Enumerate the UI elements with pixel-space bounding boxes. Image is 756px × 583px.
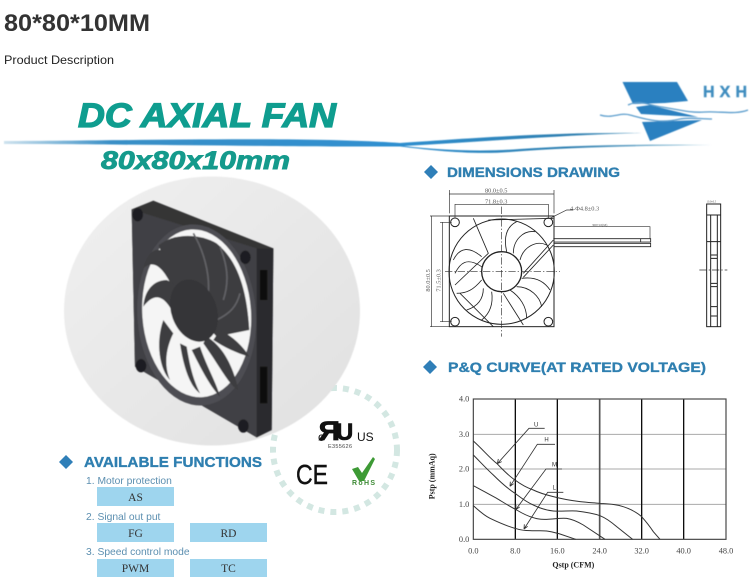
fan blades xyxy=(143,236,249,397)
dimension labels xyxy=(425,188,717,292)
heading: P&Q curve: P&Q CURVE(AT RATED VOLTAGE) xyxy=(448,359,706,375)
y axis labels: 2.0 xyxy=(459,465,469,474)
dotted certification ring xyxy=(273,388,397,512)
side view xyxy=(707,204,721,327)
dimension labels: 80.0±0.5 xyxy=(425,269,432,292)
UL mark: c xyxy=(318,430,324,444)
CE mark: CE xyxy=(296,459,328,490)
x axis labels: 16.0 xyxy=(550,546,565,555)
banner subheading: size: 80x80x10mm xyxy=(101,147,290,175)
fan mounting holes xyxy=(132,208,267,433)
front view xyxy=(449,216,554,327)
subtitle: product description: Product Description xyxy=(4,53,114,67)
UL mark: R xyxy=(319,416,340,447)
curve leader lines xyxy=(497,428,563,529)
RoHS mark: RoHS xyxy=(352,480,375,487)
dimension labels: 4-Φ4.8±0.3 xyxy=(570,206,599,213)
function group: speed control mode: 3. Speed control mode xyxy=(86,547,190,558)
y axis title: Pstp (mmAq) xyxy=(428,453,437,499)
product photo disc xyxy=(64,176,360,446)
x axis labels: 48.0 xyxy=(719,546,733,555)
function group: motor protection: 1. Motor protection xyxy=(86,476,172,487)
curves xyxy=(473,441,660,539)
function group: signal output: 2. Signal out put xyxy=(86,512,161,523)
certification marks xyxy=(296,416,375,490)
function group: speed control mode: TC xyxy=(221,563,236,575)
curve labels: L xyxy=(553,486,557,492)
UL mark: U xyxy=(336,419,353,446)
product photo: fan xyxy=(131,201,273,437)
curve labels: H xyxy=(544,438,549,444)
fan opening xyxy=(137,226,257,401)
dimension labels: 71.8±0.3 xyxy=(485,198,507,205)
blade highlights xyxy=(193,233,240,320)
x axis labels: 40.0 xyxy=(676,546,691,555)
banner heading: DC axial fan: DC AXIAL FAN xyxy=(78,97,338,135)
logo wordmark: HXH xyxy=(703,84,747,101)
logo: HXH xyxy=(600,82,748,141)
dimension labels: 300±10(M) xyxy=(592,223,607,227)
heading: available functions: AVAILABLE FUNCTIONS xyxy=(84,455,262,471)
horizontal grid xyxy=(473,434,726,504)
dimension labels: 10.0±0.5 xyxy=(707,201,717,204)
x axis labels: 24.0 xyxy=(592,546,607,555)
function group: motor protection xyxy=(86,476,174,506)
UL mark: US xyxy=(357,430,374,444)
function group: signal output: RD xyxy=(221,528,236,540)
title: 80*80*10MM xyxy=(4,10,150,37)
x axis labels: 8.0 xyxy=(510,546,521,555)
x axis title: Qstp (CFM) xyxy=(552,561,595,570)
fan frame xyxy=(132,201,273,437)
wires xyxy=(553,239,651,247)
dimension lines xyxy=(430,190,727,337)
UL mark xyxy=(318,416,374,450)
x axis labels xyxy=(468,546,733,555)
plot border xyxy=(473,399,726,539)
heading: dimensions drawing: DIMENSIONS DRAWING xyxy=(447,164,620,180)
y axis labels xyxy=(459,395,469,544)
curve labels: U xyxy=(534,422,538,428)
x axis labels: 0.0 xyxy=(468,546,479,555)
banner swoosh xyxy=(4,133,712,153)
y axis labels: 4.0 xyxy=(459,395,469,404)
function group: speed control mode: PWM xyxy=(122,563,149,575)
P&Q chart xyxy=(428,395,733,570)
vertical grid xyxy=(515,399,684,539)
curve labels xyxy=(534,422,557,492)
y axis labels: 0.0 xyxy=(459,535,469,544)
x axis labels: 32.0 xyxy=(634,546,649,555)
function group: signal output: FG xyxy=(128,528,143,540)
function group: signal output xyxy=(86,512,267,542)
dimension labels: 71.5±0.3 xyxy=(436,269,443,292)
curve labels: M xyxy=(552,462,557,468)
fan hub xyxy=(162,273,226,348)
y axis labels: 1.0 xyxy=(459,500,469,509)
dimensions drawing xyxy=(425,188,727,337)
dimension labels: 80.0±0.5 xyxy=(485,188,507,195)
UL mark: E355626 xyxy=(328,444,352,450)
function group: motor protection: AS xyxy=(128,492,143,504)
function group: speed control mode xyxy=(86,547,267,577)
y axis labels: 3.0 xyxy=(459,430,469,439)
